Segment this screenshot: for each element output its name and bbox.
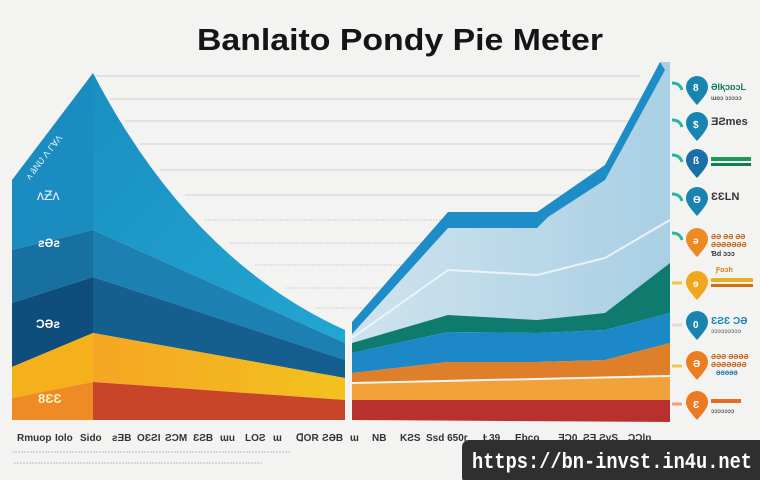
legend: pins: ƏIⱪɔɒɔL — [711, 82, 747, 92]
chart: right layered area — [352, 62, 670, 422]
legend: pins: ƐƧƐ ƆƏ — [711, 316, 747, 327]
legend: pins: ƏƏ ƏƏ ƏƏ — [711, 234, 745, 241]
x-axis labels: ƧƏB — [322, 433, 343, 444]
legend: pins: ɯɒɔ ɔɔɔɔɔ — [711, 96, 742, 102]
legend: pins: ß — [693, 156, 699, 167]
legend: pins: ƎƧmes — [711, 116, 748, 128]
watermark — [462, 440, 760, 480]
x-axis labels: ƨƎB — [112, 433, 131, 444]
chart: left layered area: ƨƏƨ — [38, 236, 60, 250]
x-axis labels: ƧƎ ƧvS — [583, 433, 618, 444]
legend: pins: ƏƏƏƏƏ — [716, 371, 738, 377]
chart: left layered area: ƆƏƨ — [36, 317, 60, 331]
x-axis labels: ƆƆlɒ — [628, 433, 651, 444]
legend: pins: ƐƐLN — [711, 191, 740, 203]
x-axis labels: Ebco — [515, 433, 539, 444]
x-axis labels: ƧƆM — [165, 433, 187, 444]
x-axis labels: ᗡOR — [296, 433, 319, 444]
front face — [93, 73, 345, 343]
legend: pins: 0 — [693, 320, 699, 331]
x-axis labels: LOƧ — [245, 433, 266, 444]
legend: pins: ɘ — [693, 279, 699, 290]
legend: pins: Ƒɒɔh — [715, 267, 733, 274]
x-axis labels: ƎƆ0 — [558, 433, 578, 444]
legend: pins: ƏƏƏƏƏƏƏ — [711, 242, 747, 249]
chart: left layered area: ᴧƵᴧ — [37, 187, 60, 203]
x-axis labels: ɯ — [350, 433, 359, 444]
legend: pins: ƏƏƏƏƏƏƏ — [711, 362, 747, 369]
x-axis labels: Rmuop — [17, 433, 51, 444]
legend: pins: Ɵ — [693, 195, 701, 206]
left face — [12, 73, 93, 250]
title: Banlaito Pondy Pie Meter — [197, 22, 603, 57]
x-axis labels — [17, 433, 651, 444]
legend: pins — [672, 76, 753, 420]
legend: pins: Ɓd ɔɔɔ — [711, 251, 735, 258]
legend: pins: 8 — [693, 83, 699, 94]
x-axis labels: ɯu — [220, 433, 235, 444]
x-axis labels: ɯ — [273, 433, 282, 444]
chart: left layered area — [12, 73, 345, 420]
legend: pins: ɔɔɔɔɔɔɔ — [711, 409, 735, 415]
x-axis labels: Sido — [80, 433, 102, 444]
x-axis labels: KƧS — [400, 433, 421, 444]
legend: pins: ƏƏƏ ƏƏƏƏ — [711, 354, 749, 361]
legend: pins: ɔɔɔɔɔɔɔɔɔ — [711, 329, 742, 335]
legend: pins: ə — [693, 236, 699, 247]
legend: pins: $ — [693, 120, 699, 131]
x-axis labels: Ssd 650r — [426, 433, 468, 444]
x-axis labels: OƐƧI — [137, 433, 161, 444]
legend: pins: Ɛ — [693, 400, 700, 411]
x-axis labels: ƐƧB — [193, 433, 213, 444]
left face labels: ᴧ ȃΝƲ Ʌ ΓⱯΛ — [24, 133, 64, 181]
x-axis labels: Iolo — [55, 433, 73, 444]
x-axis labels: Ƚ39 — [483, 433, 501, 444]
chart: left layered area: 8ƐƐ — [38, 391, 62, 406]
x-axis labels: NB — [372, 433, 386, 444]
legend: pins: Ə — [693, 359, 700, 370]
